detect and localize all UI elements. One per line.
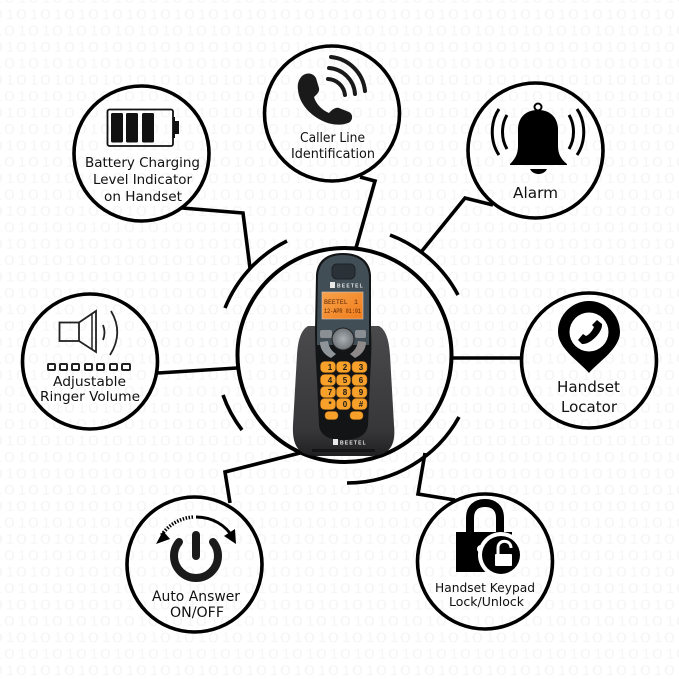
handset upper panel bbox=[317, 255, 369, 345]
label: Handset bbox=[557, 378, 620, 396]
connector lines bbox=[158, 177, 520, 503]
label: Alarm bbox=[513, 184, 558, 202]
icon: power button with arrows bbox=[156, 517, 236, 578]
keypad: 1 bbox=[328, 363, 333, 372]
label: Level Indicator bbox=[93, 173, 193, 188]
brand on handset: BEETEL bbox=[337, 284, 364, 290]
panel: caller line identification bbox=[264, 46, 400, 181]
central phone circle bbox=[238, 248, 452, 462]
panel: alarm bbox=[468, 83, 603, 218]
earpiece bbox=[332, 264, 355, 279]
charging base bbox=[293, 326, 394, 456]
keypad bbox=[320, 362, 367, 420]
panel: battery charging bbox=[74, 86, 209, 221]
label: on Handset bbox=[104, 190, 182, 205]
icon: phone with signal bbox=[298, 57, 365, 125]
keypad: 2 bbox=[343, 363, 348, 372]
label: Auto Answer bbox=[152, 589, 240, 605]
keypad: 5 bbox=[343, 376, 348, 385]
label: Battery Charging bbox=[85, 156, 200, 171]
navigation keys bbox=[320, 328, 366, 358]
keypad: 7 bbox=[328, 388, 333, 397]
panel: adjustable ringer volume bbox=[22, 294, 158, 429]
label: Identification bbox=[291, 147, 375, 162]
label bbox=[435, 580, 535, 609]
display: 1 bbox=[354, 299, 358, 306]
keypad: * bbox=[328, 400, 332, 409]
brand on base bbox=[333, 439, 367, 446]
label: Locator bbox=[561, 398, 618, 416]
keypad: 8 bbox=[343, 388, 348, 397]
keypad: 9 bbox=[359, 388, 364, 397]
icon: padlock with unlock badge bbox=[456, 503, 524, 578]
icon: ringing bell bbox=[492, 104, 584, 174]
keypad: 3 bbox=[359, 363, 364, 372]
icon: battery bbox=[108, 110, 179, 146]
phone product image bbox=[293, 253, 394, 456]
panel: handset keypad lock bbox=[418, 494, 552, 629]
label bbox=[291, 131, 375, 162]
base slot bbox=[312, 449, 375, 452]
panel: handset locator bbox=[522, 293, 656, 428]
keypad: 4 bbox=[328, 376, 333, 385]
panel: auto answer bbox=[127, 497, 262, 632]
brand on base: BEETEL bbox=[340, 440, 367, 446]
icon: location pin with phone bbox=[558, 301, 620, 373]
label bbox=[557, 378, 620, 416]
label: Adjustable bbox=[53, 375, 126, 390]
label: Ringer Volume bbox=[40, 390, 140, 405]
display: BEETEL bbox=[324, 299, 348, 306]
label: Caller Line bbox=[300, 131, 365, 146]
label bbox=[40, 375, 140, 405]
label: Lock/Unlock bbox=[449, 594, 525, 609]
icon: speaker bbox=[60, 311, 117, 355]
outer broken ring arcs bbox=[223, 235, 459, 483]
label: ON/OFF bbox=[170, 605, 224, 621]
brand on handset bbox=[330, 282, 364, 290]
label bbox=[85, 156, 200, 205]
label bbox=[152, 589, 240, 621]
keypad: # bbox=[359, 400, 364, 409]
keypad: 0 bbox=[343, 400, 348, 409]
volume level squares bbox=[48, 364, 130, 370]
handset body bbox=[315, 253, 371, 440]
display bbox=[322, 292, 363, 319]
display: 12-APR 01:01 bbox=[324, 308, 361, 315]
label: Handset Keypad bbox=[435, 580, 535, 595]
keypad: 6 bbox=[359, 376, 364, 385]
